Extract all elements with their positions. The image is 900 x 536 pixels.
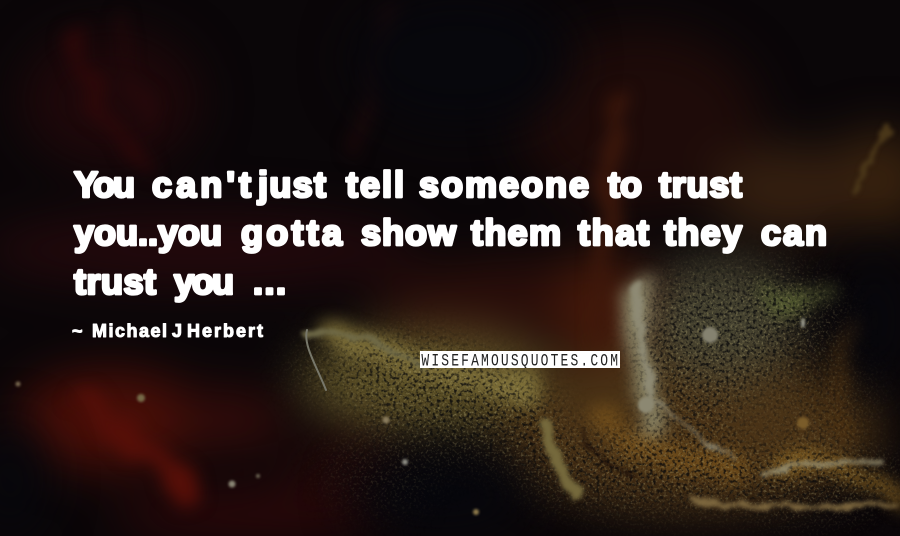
attribution: Michael [92,321,167,341]
quote text: someone [419,164,589,205]
texture speckle [286,252,900,533]
quote text: just [257,164,326,205]
attribution: Herbert [187,321,263,341]
attribution [72,321,263,341]
quote text: you [174,261,234,302]
quote text: tell [346,164,404,205]
quote text: can't [152,164,251,205]
light strands [305,125,895,507]
quote text: gotta [241,212,343,253]
quote text: can [761,212,827,253]
quote text: you..you [74,212,222,253]
quote text: You [74,164,135,205]
quote text: show [361,212,457,253]
quote text: ... [253,261,286,302]
quote text: them [471,212,561,253]
quote text: to [608,164,642,205]
attribution: ~ [72,321,83,341]
quote text: that [578,212,649,253]
quote text: trust [659,164,742,205]
attribution: J [172,321,182,341]
quote text: trust [74,261,156,302]
nebula stars [16,318,809,515]
quote text [74,164,827,302]
quote text: they [664,212,742,253]
